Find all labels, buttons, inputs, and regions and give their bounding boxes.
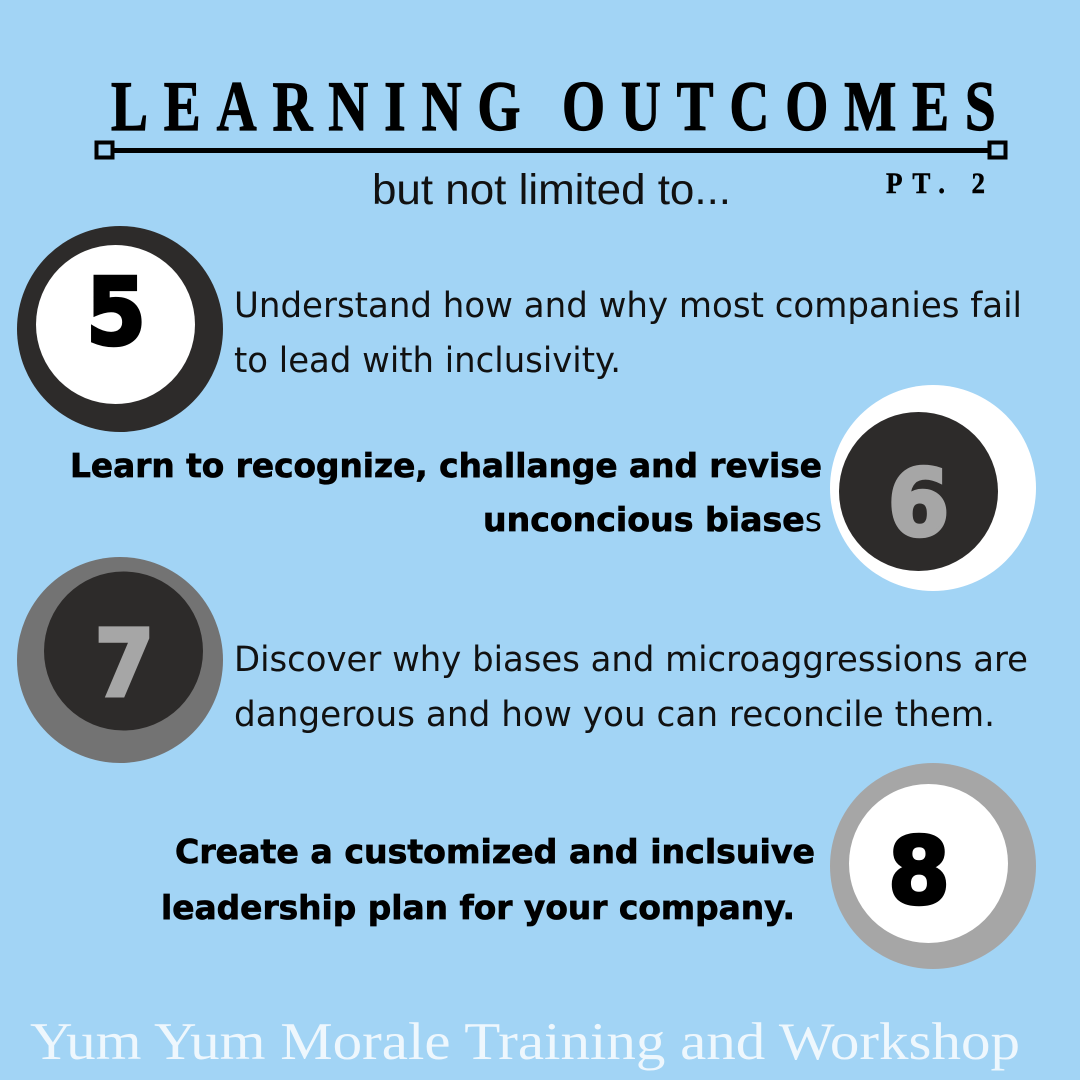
item 5 text bbox=[234, 286, 1022, 381]
item 7 badge bbox=[17, 557, 223, 763]
item 6 badge bbox=[830, 385, 1036, 591]
item 8 badge bbox=[830, 763, 1036, 969]
item 8 text bbox=[161, 832, 815, 927]
title: LEARNING bbox=[111, 66, 520, 146]
title: OUTCOMES bbox=[562, 66, 996, 146]
item 7 badge: 7 bbox=[94, 610, 154, 718]
item 7 text: dangerous and how you can reconcile them. bbox=[234, 695, 995, 735]
item 6 badge: 6 bbox=[888, 449, 950, 557]
item 5 badge bbox=[17, 226, 223, 432]
item 6 text: unconcious biases bbox=[483, 500, 822, 539]
title bbox=[111, 66, 996, 146]
part label: PT. 2 bbox=[886, 168, 985, 200]
footer: Yum Yum Morale Training and Workshop bbox=[30, 1013, 1020, 1071]
item 5 text: to lead with inclusivity. bbox=[234, 341, 621, 381]
item 5 text: Understand how and why most companies fail bbox=[234, 286, 1022, 326]
item 8 badge: 8 bbox=[888, 817, 950, 925]
item 8 text: leadership plan for your company. bbox=[161, 888, 795, 927]
item 7 text: Discover why biases and microaggressions are bbox=[234, 640, 1028, 680]
item 6 text bbox=[70, 446, 822, 539]
item 8 text: Create a customized and inclsuive bbox=[175, 832, 815, 871]
title underline bbox=[96, 142, 1006, 158]
item 5 badge: 5 bbox=[86, 258, 146, 366]
item 7 text bbox=[234, 640, 1028, 735]
subtitle: but not limited to... bbox=[372, 166, 731, 214]
item 6 text: Learn to recognize, challange and revise bbox=[70, 446, 822, 485]
